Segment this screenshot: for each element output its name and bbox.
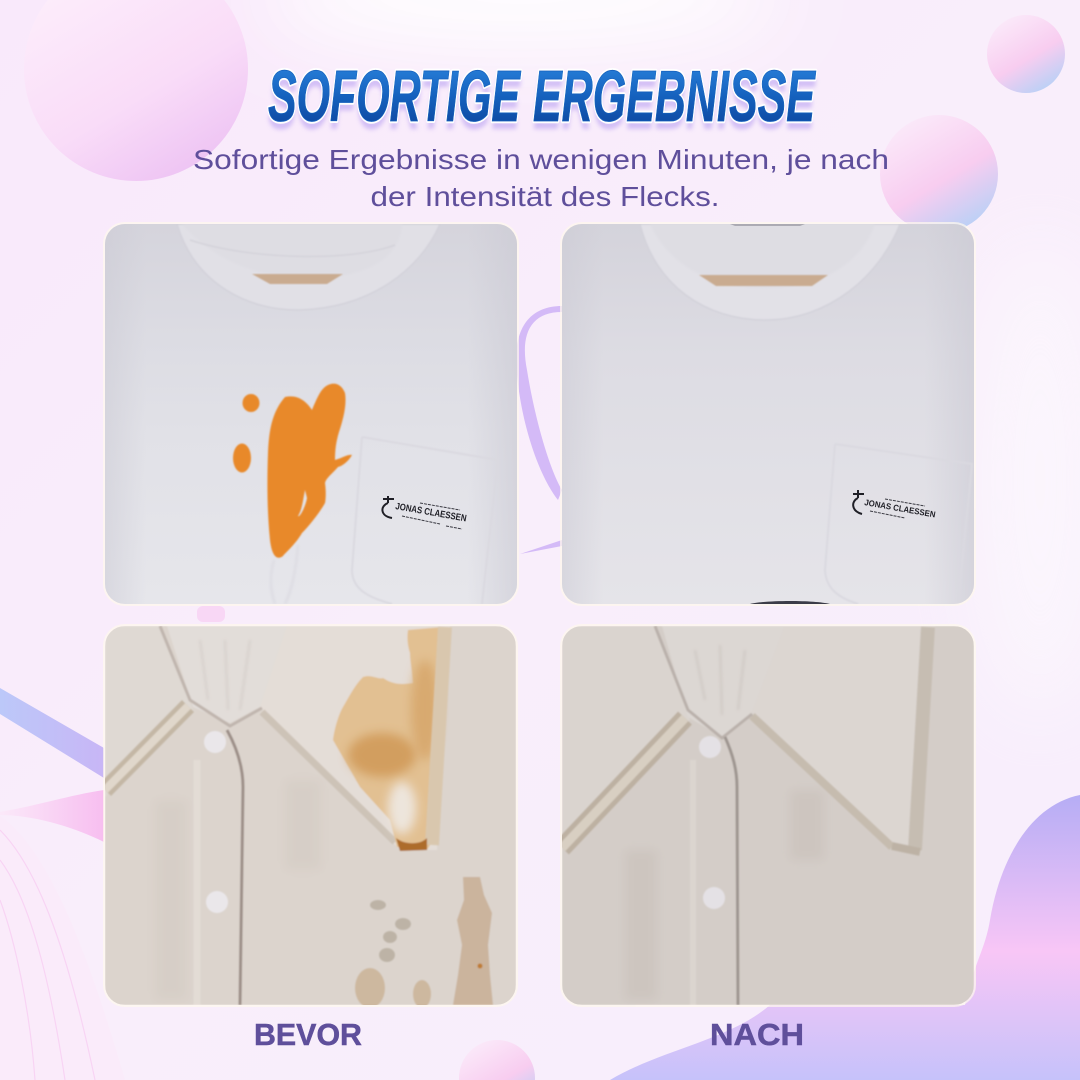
- decorative sliver below top photo: [197, 606, 225, 622]
- fabric shading: [634, 798, 816, 992]
- collar stain: [333, 627, 447, 851]
- pocket with logo: [352, 496, 467, 604]
- collar: [640, 224, 900, 320]
- subtitle: [193, 144, 889, 212]
- lace trim: [562, 626, 928, 852]
- right collar: [754, 627, 920, 844]
- subtitle: der Intensität des Flecks.: [370, 181, 720, 212]
- label: after: NACH: [710, 1017, 804, 1052]
- title shadow: ERGEBNISSE: [533, 65, 816, 145]
- stain: [233, 384, 352, 558]
- left collar: [562, 626, 690, 850]
- fabric shading: [155, 780, 321, 1000]
- placket: [227, 730, 243, 1005]
- decorative bubble: top right: [987, 15, 1065, 93]
- title outline: ERGEBNISSE: [533, 57, 816, 137]
- subtitle: Sofortige Ergebnisse in wenigen Minuten, je nach: [193, 144, 889, 175]
- title outline: SOFORTIGE: [268, 57, 521, 137]
- decorative ribbon: centre: [516, 306, 562, 554]
- decorative blob: bottom right: [610, 795, 1080, 1080]
- label: before: BEVOR: [254, 1017, 362, 1052]
- dark object at bottom: [750, 601, 830, 604]
- buttons: [699, 736, 725, 909]
- decorative bubble: beside subtitle: [880, 115, 998, 233]
- pocket with logo: [826, 490, 936, 604]
- photo frame glows: [103, 222, 976, 1007]
- left collar: [105, 626, 193, 797]
- photo: T-shirt clean (after): [562, 224, 974, 604]
- drip stains: [355, 877, 493, 1008]
- photo: blouse with stain (before): [105, 626, 516, 1008]
- right collar: [260, 626, 450, 850]
- decorative wave: left pink: [0, 790, 125, 1080]
- decorative bubble: top left: [24, 0, 248, 181]
- title shadow: SOFORTIGE: [268, 65, 521, 145]
- decorative band: left blue: [0, 688, 104, 778]
- pocket with logo: JONAS CLAESSEN: [394, 501, 467, 524]
- pocket with logo: JONAS CLAESSEN: [864, 497, 936, 519]
- title: [268, 57, 816, 145]
- title text: SOFORTIGE: [268, 57, 521, 137]
- photo: blouse clean (after): [562, 626, 974, 1005]
- collar: [179, 225, 438, 288]
- title text: ERGEBNISSE: [533, 57, 816, 137]
- placket: [725, 737, 738, 1005]
- gathers: [662, 626, 785, 737]
- lace trim: [105, 626, 395, 842]
- decorative bubble: bottom centre: [459, 1040, 535, 1080]
- photo: T-shirt with stain (before): [105, 224, 517, 604]
- gathers: [167, 626, 287, 723]
- buttons: [204, 731, 228, 913]
